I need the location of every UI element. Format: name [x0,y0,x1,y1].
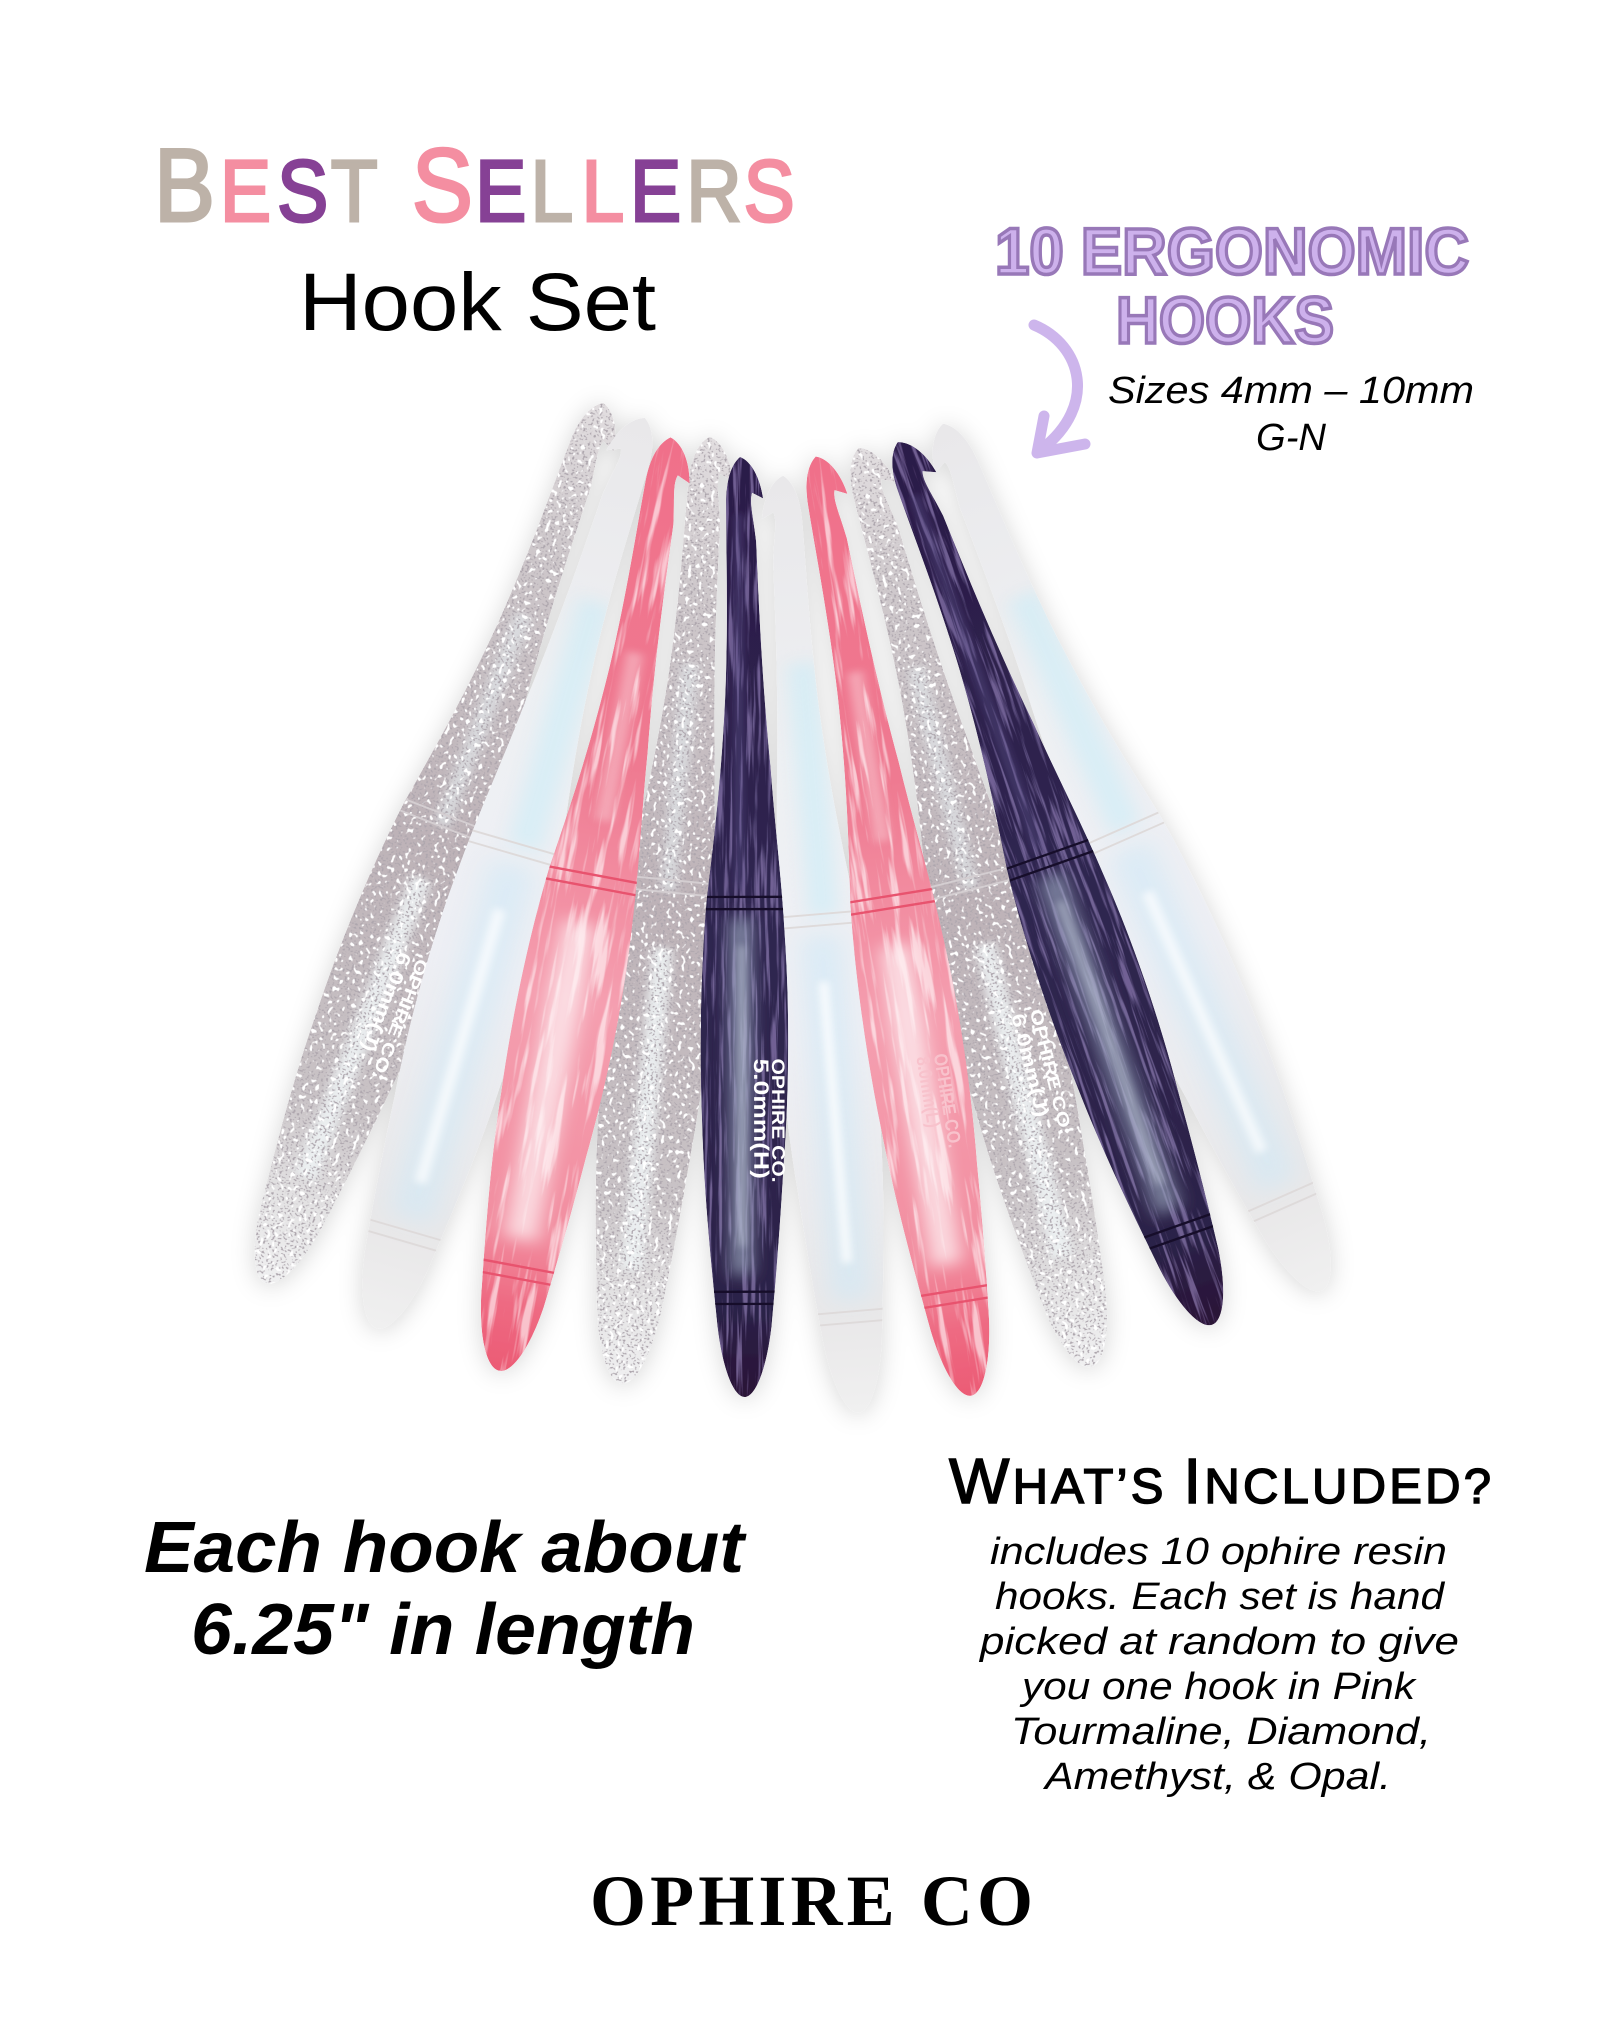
sizes text [1108,370,1474,459]
hook 6: opal [730,472,908,1417]
callout heading: 10 ergonomic hooks: 10 ERGONOMIC [995,214,1469,288]
hook 1: diamond: OPHIRE CO. [367,956,431,1081]
hook length statement [144,1508,747,1670]
included description: Amethyst, & Opal. [1043,1756,1391,1798]
hook 10: opal [890,403,1371,1312]
hook length statement: Each hook about [144,1508,747,1588]
sizes text: G-N [1256,417,1327,459]
hook 7: pink tourmaline: 8.0mm(L) [912,1055,945,1129]
hook 7: pink tourmaline [769,448,1021,1404]
hook 8: diamond [808,434,1145,1380]
hook 4: diamond [568,432,767,1389]
hook 9: amethyst [851,423,1262,1342]
title: Best Sellers: B [154,127,215,243]
hook 5: amethyst: OPHIRE CO. [768,1059,789,1183]
title: Best Sellers: E [630,143,681,240]
callout heading: 10 ergonomic hooks: HOOKS [1116,283,1334,357]
hook 3: pink tourmaline [446,428,727,1381]
sizes text: Sizes 4mm – 10mm [1108,370,1474,412]
title: Best Sellers: S [412,127,473,243]
icon: curved arrow [1034,325,1085,453]
hook 5: amethyst: 5.0mm(H) [749,1059,772,1179]
title: Best Sellers [154,127,795,243]
included description: you one hook in Pink [1019,1666,1417,1708]
title: Best Sellers: S [744,143,795,240]
included description [979,1531,1459,1798]
included description: includes 10 ophire resin [990,1531,1447,1573]
title: Best Sellers: R [686,143,742,240]
hook 1: diamond: 6.0mm(J) [357,949,416,1055]
title: Best Sellers: E [475,143,526,240]
title: Best Sellers: S [277,143,328,240]
callout heading: 10 ergonomic hooks [995,214,1469,357]
hook 2: opal [323,401,695,1344]
hook length statement: 6.25" in length [191,1590,695,1670]
title: Best Sellers: L [531,143,573,240]
title: Best Sellers: T [331,143,378,240]
hook 1: diamond [214,384,658,1303]
hook 5: amethyst [697,457,791,1397]
hook set photo [214,384,1371,1417]
title: Best Sellers: E [220,143,271,240]
heading: What's Included: WHAT’S INCLUDED? [949,1445,1491,1517]
title: Best Sellers: L [582,143,624,240]
hook 8: diamond: 6.0mm(J) [1007,1011,1054,1119]
subtitle: Hook Set: Hook Set [299,257,656,348]
included description: hooks. Each set is hand [995,1576,1446,1618]
hook 7: pink tourmaline: OPHIRE CO. [930,1052,966,1149]
brand name: OPHIRE CO [590,1861,1033,1941]
hook 8: diamond: OPHIRE CO. [1026,1007,1075,1136]
included description: Tourmaline, Diamond, [1011,1711,1431,1753]
included description: picked at random to give [979,1621,1459,1663]
